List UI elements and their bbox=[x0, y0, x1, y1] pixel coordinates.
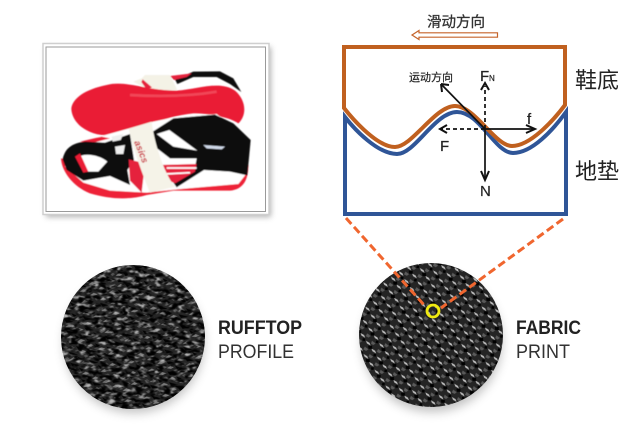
arrow: slide direction bbox=[412, 30, 498, 40]
label: mat: 地垫 bbox=[575, 159, 619, 184]
force labels: N bbox=[480, 183, 491, 200]
force labels: F bbox=[440, 138, 449, 155]
panel: shoe photo frame bbox=[43, 44, 271, 217]
slide direction label: 滑动方向 bbox=[427, 14, 485, 31]
sole outline bbox=[344, 47, 565, 147]
mat outline bbox=[345, 112, 566, 214]
callout: zoom lines from mat to fabric bbox=[346, 218, 563, 317]
circle: fabric texture bbox=[359, 263, 503, 412]
text: fabric print bbox=[516, 317, 581, 363]
text: fabric print: PRINT bbox=[516, 341, 570, 363]
force labels bbox=[409, 68, 532, 200]
upper shoe bbox=[71, 71, 244, 135]
lower shoe: asics bbox=[132, 139, 150, 164]
force labels: f bbox=[527, 111, 532, 128]
text: rufftop profile: RUFFTOP bbox=[218, 317, 302, 339]
force labels: N bbox=[489, 74, 495, 83]
label: shoe sole: 鞋底 bbox=[575, 68, 619, 93]
force labels: F bbox=[480, 68, 489, 85]
text: rufftop profile: PROFILE bbox=[218, 341, 294, 363]
shoe photo bbox=[61, 71, 251, 198]
lower shoe bbox=[61, 114, 251, 198]
force arrows bbox=[440, 83, 535, 180]
force labels: 运动方向 bbox=[409, 70, 453, 84]
text: fabric print: FABRIC bbox=[516, 317, 581, 339]
diagram: shoe sole and mat forces bbox=[344, 14, 619, 214]
circle: rufftop texture bbox=[61, 265, 205, 413]
text: rufftop profile bbox=[218, 317, 302, 363]
